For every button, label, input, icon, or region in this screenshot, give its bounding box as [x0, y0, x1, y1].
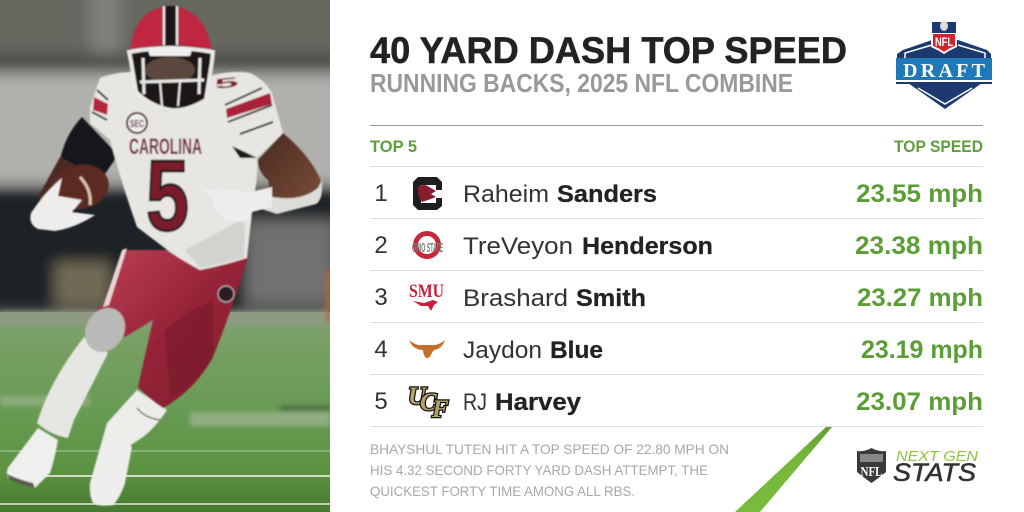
row 4: Jaydon Blue: Jaydon	[463, 337, 542, 364]
row 5: RJ Harvey: Harvey	[495, 389, 581, 416]
SEC patch: SEC	[130, 119, 144, 130]
front leg: sock and cleat	[90, 390, 167, 506]
column header: top 5: TOP 5	[370, 137, 417, 156]
helmet	[129, 6, 213, 112]
footnote	[370, 441, 729, 499]
logo: NFL Draft shield: DRAFT	[903, 60, 986, 82]
shoulder stripes	[92, 88, 273, 134]
row 3: Brashard Smith: Smith	[576, 285, 646, 312]
trailing leg: sock and cleat	[7, 337, 108, 488]
row 3: Brashard Smith: Brashard	[463, 285, 568, 312]
player: 5	[214, 74, 240, 92]
logo: NFL Draft shield	[896, 21, 992, 109]
row 2: TreVeyon Henderson: 23.38 mph	[855, 232, 983, 260]
row 4: Jaydon Blue	[374, 336, 983, 364]
logo: SMU	[409, 281, 444, 311]
row 5: RJ Harvey: 5	[374, 388, 388, 415]
logo: NFL Draft shield: NFL	[935, 35, 953, 49]
row 2: TreVeyon Henderson: 2	[374, 232, 388, 259]
logo: NFL Next Gen Stats: NFL	[860, 465, 882, 480]
logo: NFL Next Gen Stats: STATS	[893, 459, 976, 487]
footnote: HIS 4.32 SECOND FORTY YARD DASH ATTEMPT, THE	[370, 462, 708, 478]
subtitle: RUNNING BACKS, 2025 NFL COMBINE	[370, 68, 793, 98]
row 2: TreVeyon Henderson	[374, 232, 983, 260]
header rule	[370, 125, 983, 126]
green slash accent	[735, 427, 832, 512]
stadium and field background	[0, 0, 350, 512]
logo: UCF: F	[431, 396, 449, 423]
row 4: Jaydon Blue: 4	[374, 336, 388, 363]
logo: Texas longhorn	[409, 340, 445, 358]
row 4: Jaydon Blue: Blue	[550, 337, 603, 364]
logo: UCF	[408, 383, 449, 423]
logo: UCF: U	[408, 383, 428, 410]
jersey wordmark: CAROLINA	[129, 134, 202, 159]
row 4: Jaydon Blue: 23.19 mph	[861, 336, 983, 364]
logo: South Carolina	[413, 177, 442, 210]
row 5: RJ Harvey: RJ	[463, 389, 487, 416]
row 2: TreVeyon Henderson: Henderson	[582, 233, 713, 260]
black sleeve	[60, 117, 118, 177]
row 2: TreVeyon Henderson: TreVeyon	[463, 233, 573, 260]
knee pad	[84, 306, 126, 352]
jersey number: 5	[146, 140, 189, 252]
row 1: Raheim Sanders: 1	[374, 180, 388, 207]
title: 40 YARD DASH TOP SPEED	[370, 30, 847, 71]
row 1: Raheim Sanders: Raheim	[463, 181, 549, 208]
photo: running back in white Carolina jersey	[0, 0, 350, 512]
logo: NFL Next Gen Stats: NEXT GEN	[896, 448, 978, 465]
row 2: TreVeyon Henderson: OHIO STATE	[412, 240, 443, 255]
left glove	[30, 178, 95, 231]
row 1: Raheim Sanders	[374, 177, 983, 210]
footnote: BHAYSHUL TUTEN HIT A TOP SPEED OF 22.80 MPH ON	[370, 441, 729, 457]
player	[7, 6, 323, 506]
logo: Ohio State	[412, 234, 443, 256]
row 1: Raheim Sanders: Sanders	[557, 181, 657, 208]
footnote: QUICKEST FORTY TIME AMONG ALL RBS.	[370, 483, 635, 499]
right arm	[258, 132, 324, 200]
right glove	[202, 187, 272, 222]
logo: SMU: SMU	[409, 281, 444, 302]
jersey	[90, 72, 283, 270]
logo: NFL Next Gen Stats	[857, 448, 978, 487]
pants logo patch	[218, 286, 234, 302]
row 5: RJ Harvey: 23.07 mph	[856, 388, 983, 416]
row 3: Brashard Smith: 3	[374, 284, 388, 311]
row 5: RJ Harvey	[374, 383, 983, 423]
football	[52, 164, 110, 210]
logo: UCF: C	[420, 389, 437, 416]
column header: top speed: TOP SPEED	[894, 137, 983, 156]
row 3: Brashard Smith	[374, 281, 983, 312]
SEC patch	[127, 113, 147, 133]
row 3: Brashard Smith: 23.27 mph	[857, 284, 983, 312]
left arm	[38, 156, 75, 200]
red pants	[97, 250, 248, 408]
row 1: Raheim Sanders: 23.55 mph	[856, 180, 983, 208]
